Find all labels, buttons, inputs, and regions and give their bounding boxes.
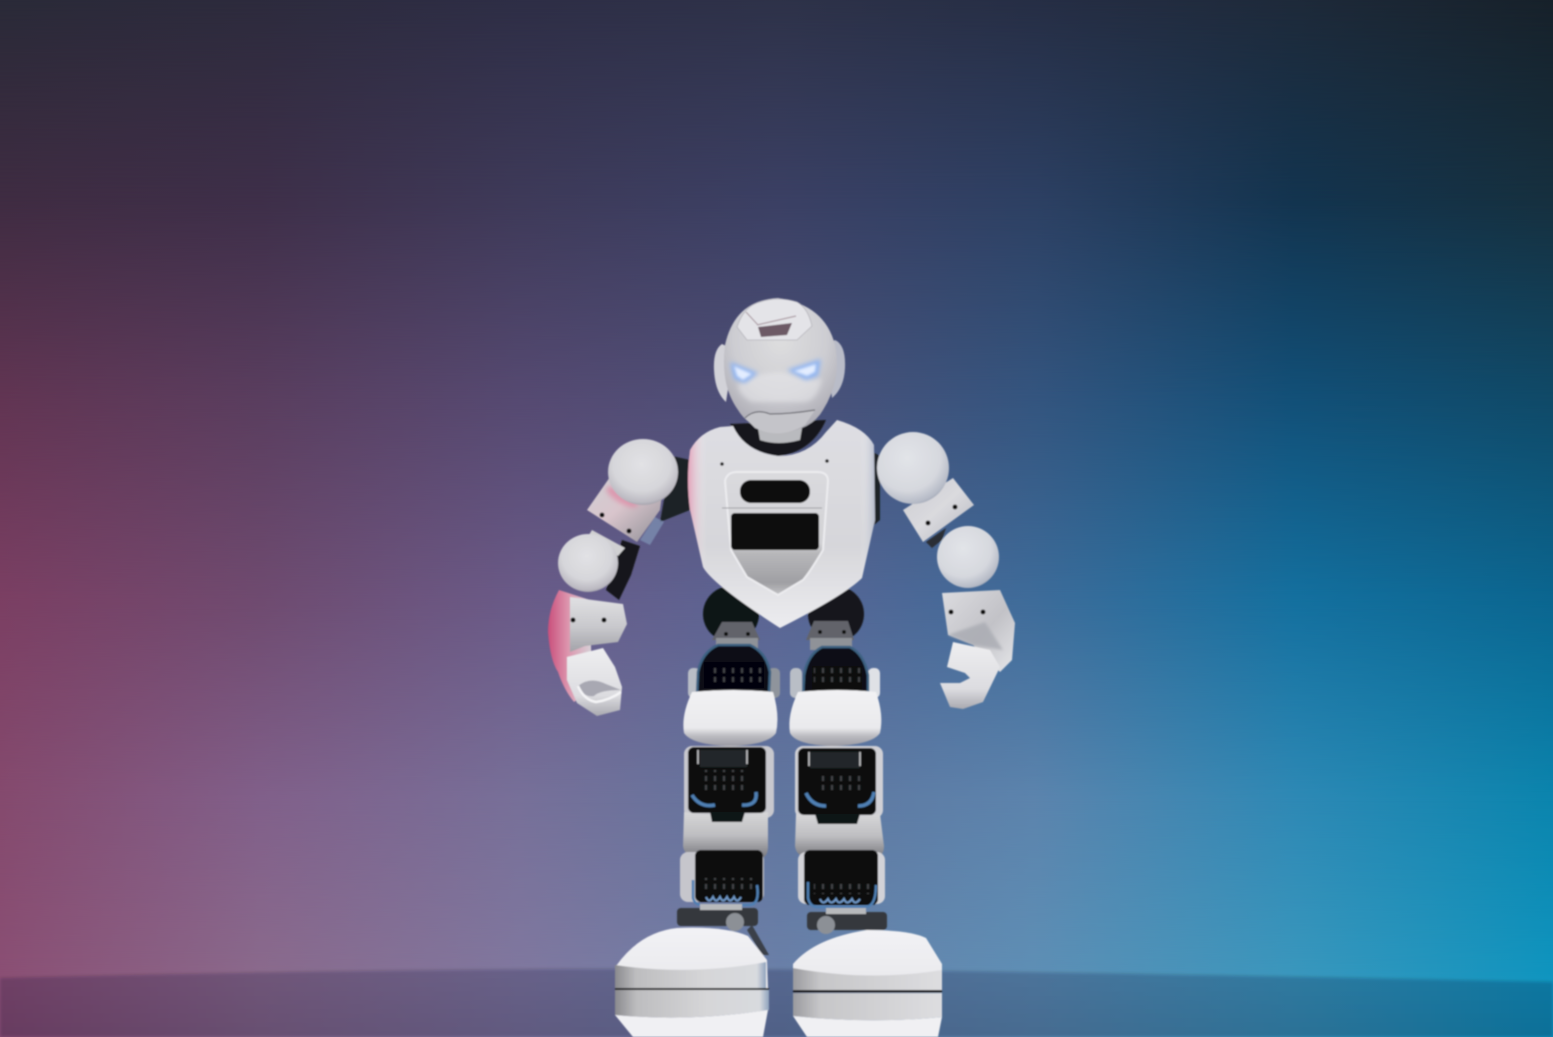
robot — [548, 298, 1015, 1037]
left elbow connector — [587, 530, 625, 556]
right forearm block — [942, 590, 1015, 672]
left ankle servo — [677, 850, 769, 955]
left knee servo — [688, 645, 780, 698]
left hand — [567, 648, 622, 716]
eye right — [787, 359, 821, 380]
chest vent — [740, 480, 810, 503]
right shoulder sphere — [877, 432, 949, 504]
head — [714, 298, 845, 433]
right shoulder connector — [866, 448, 880, 530]
right knee servo — [790, 647, 880, 698]
right leg — [789, 647, 942, 1037]
left shin shell — [683, 812, 768, 858]
right ear — [826, 340, 845, 398]
right shin shell — [795, 814, 884, 858]
right foot reflection — [793, 993, 942, 1037]
left shoulder sphere — [608, 439, 678, 505]
right foot — [793, 930, 942, 992]
left upper arm block — [587, 477, 662, 542]
right upper arm block — [903, 478, 974, 542]
left inner arm dark joint — [606, 540, 640, 600]
chest shield panel — [725, 472, 828, 595]
helmet crest — [737, 299, 812, 340]
left thigh shell — [683, 690, 777, 746]
left forearm pink shell — [548, 590, 592, 702]
left elbow sphere — [558, 534, 618, 592]
chest screen — [731, 513, 819, 550]
right lower knee servo — [795, 746, 883, 818]
right hand — [940, 642, 1000, 709]
pink glow under shoulder — [603, 483, 641, 511]
chest screw holes — [720, 459, 829, 466]
left ear — [714, 344, 734, 402]
chest seam — [722, 507, 822, 509]
left foot reflection — [615, 990, 769, 1037]
left shoulder connector — [660, 456, 690, 522]
neck — [730, 420, 826, 456]
right ankle servo — [798, 850, 887, 934]
face shading — [738, 372, 822, 402]
torso — [688, 420, 875, 628]
hip joints — [703, 586, 864, 650]
right arm — [866, 432, 1015, 709]
left foot — [615, 928, 769, 990]
chin — [745, 410, 815, 433]
helmet notch — [758, 323, 792, 337]
right thigh shell — [789, 690, 881, 746]
eye left — [730, 362, 758, 383]
head shell — [724, 298, 837, 433]
left leg — [615, 645, 780, 1037]
left arm — [548, 439, 690, 716]
left lower knee servo — [684, 746, 774, 818]
reflective floor — [0, 969, 1553, 1037]
right elbow sphere — [937, 526, 999, 588]
left forearm block — [570, 597, 627, 652]
